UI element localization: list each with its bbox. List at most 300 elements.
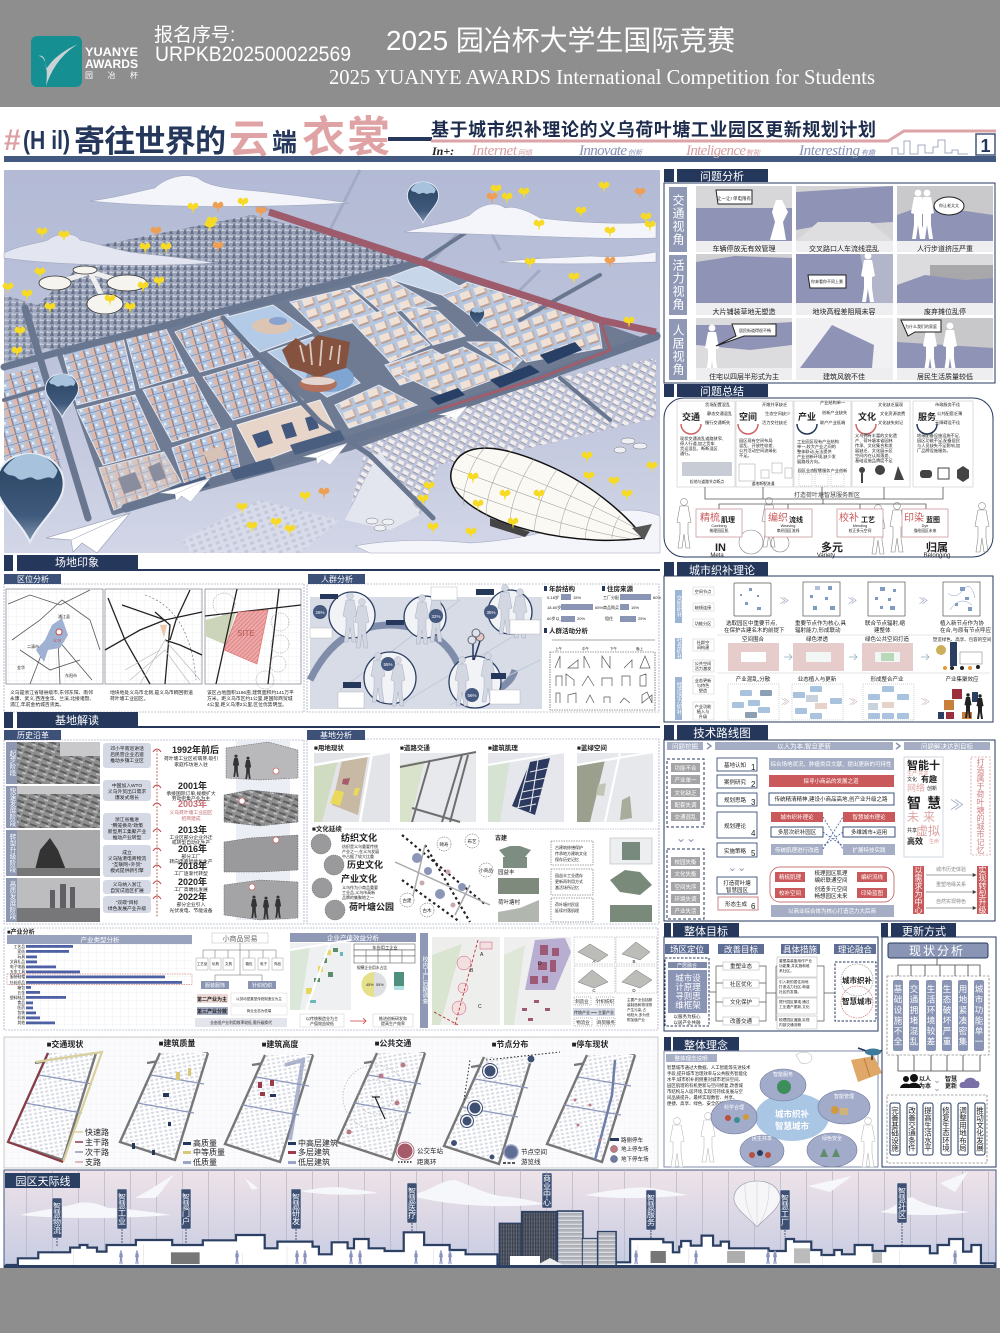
photo: four-storey housing <box>696 318 792 381</box>
timeline: 荷叶塘工业区初萌芽,吸引 <box>164 755 218 762</box>
heritage elevations and texts: 古建 <box>495 834 507 842</box>
strategy boxes: 描绘园区未来 <box>914 528 937 533</box>
historic photos <box>6 742 100 922</box>
cultural continuity: 历史文化 <box>347 859 383 870</box>
outcome arrows <box>913 865 988 915</box>
five problem columns: 市政服务不佳 <box>935 401 960 408</box>
concept description: 市结构与人居环境,实现可持续发展与空 <box>667 1088 743 1095</box>
perspective diagrams and conclusions: 装制造和物流物 <box>627 1002 653 1007</box>
strategy boxes: 校补 <box>839 511 859 524</box>
concrete measures: 系社区。 <box>779 968 794 973</box>
heritage elevations and texts: 园益丰工业遗存 <box>555 872 583 878</box>
panel: overall concept: 整体理念 <box>684 1038 728 1052</box>
bar chart: industry types: 针纺织品 <box>10 980 25 985</box>
research steps: ⌄⌄ <box>728 862 746 874</box>
map: site <box>205 589 301 689</box>
cultural continuity: ■文化延续 <box>312 824 342 833</box>
panel: urban fabric mending theory <box>664 562 993 722</box>
central diagram: 科学合理 <box>724 1104 744 1111</box>
crowd activity analysis: 上午 <box>555 646 562 651</box>
row 2: ring courts: 空间围合 <box>742 635 764 643</box>
bar chart: industry types: 工艺品 <box>14 944 25 949</box>
enterprise output analysis: 产值效益较低 <box>310 1020 334 1026</box>
photo: parked cars: 车辆停放无有效管理 <box>712 244 776 253</box>
panel: site analysis: 基地分析 <box>320 730 352 740</box>
pie chart: 45% <box>366 983 374 987</box>
small commodity trade tree: 服装服饰 <box>205 982 225 989</box>
concept description <box>666 1054 751 1107</box>
five problem columns: 生态空间缺少 <box>765 410 790 417</box>
keyword row: 创新 <box>628 149 643 157</box>
strategy boxes <box>696 509 948 537</box>
panel: crowd analysis: 人群分析 <box>321 574 353 584</box>
age structure bars: 18-60岁 <box>547 604 561 610</box>
improvement targets: 改善交通 <box>730 1017 752 1025</box>
heritage elevations and texts: 保存历史记忆 <box>555 856 579 862</box>
cultural continuity: 荷叶塘公园 <box>349 901 394 912</box>
history descriptions: 义乌陆港电商物流 <box>108 855 146 862</box>
word cloud: 网络 <box>907 782 925 793</box>
concept description: 智慧城市通过大数据、人工智能等先进技术 <box>667 1064 751 1071</box>
five problem columns: 智慧服务 <box>814 467 831 474</box>
history descriptions: 后民营企业迅速 <box>110 751 144 758</box>
city blocks east <box>290 265 602 428</box>
panel: crowd analysis <box>307 574 661 712</box>
residence source bars: 住房来源 <box>607 584 634 593</box>
strategy bars: 智慧城市理论 <box>852 813 886 821</box>
concrete measures: 打造活力社区,和谐 <box>779 984 810 989</box>
site maps A-D <box>432 937 571 1025</box>
dark parking patches <box>170 342 582 498</box>
clouds <box>4 176 660 553</box>
column headings <box>665 944 876 954</box>
strategy boxes: Mending <box>853 524 867 528</box>
timeline: 工厂高端化发展 <box>174 886 208 893</box>
site positioning: 城市设 <box>675 973 701 983</box>
site positioning: 计原理 <box>675 982 701 992</box>
site maps A-D: C <box>478 1004 482 1010</box>
timeline: 2003年 <box>178 798 207 809</box>
perspective diagrams and conclusions: 物流业 <box>576 1019 590 1026</box>
keyword row: Interesting <box>798 143 860 159</box>
five problem columns: 货运混乱、断断混区 <box>680 445 718 452</box>
concrete measures: 提升园区景观,通过 <box>779 999 810 1004</box>
map: land use: ■用地现状 <box>314 743 344 752</box>
left labels: 交织织补 <box>676 594 682 618</box>
historic photos: 转型升级阶段 <box>8 832 16 874</box>
strategy boxes: 蓝图 <box>926 515 940 524</box>
research steps: 智慧园区 <box>726 886 748 894</box>
five problem columns: 服务 <box>918 411 936 422</box>
strategy outcome group: 校补空间 <box>779 889 801 897</box>
city blocks west <box>62 313 303 510</box>
action pills: 完善基础设施 <box>890 1105 900 1153</box>
heritage elevations and texts: 延续村落肌理 <box>555 907 579 913</box>
crowd activity analysis: 人群活动分析 <box>549 626 588 635</box>
photo: parked cars <box>696 186 792 253</box>
map: building height: 多层建筑 <box>298 1147 330 1157</box>
enterprise output analysis: 企业产值效益分析 <box>327 933 380 942</box>
strategy boxes: 校正多元空间 <box>849 528 872 533</box>
map: green space <box>577 743 653 822</box>
research steps: 规划理论 <box>724 822 746 830</box>
people sketches <box>677 498 989 554</box>
photo: abandoned stalls: 废弃摊位乱停 <box>924 307 966 316</box>
crowd map with circles: 26% <box>315 610 325 615</box>
icon: Yuanye Awards logo: AWARDS <box>85 57 138 71</box>
map: site: SITE <box>237 629 255 638</box>
concrete measures <box>776 957 835 1029</box>
cultural continuity: 产业文化 <box>341 873 377 884</box>
photo: idle plot: 你来看你不同上景 <box>811 278 843 284</box>
panel: park skyline <box>4 1170 996 1268</box>
bar chart: industry types: 食品 <box>17 1000 25 1005</box>
photo: bare lawn <box>696 254 792 316</box>
strategy outcome group: 精梳肌理 <box>779 873 801 881</box>
five problem columns: 文化缺乏展现 <box>878 401 903 408</box>
five problem columns: 厂品牌设施服务。 <box>917 447 951 454</box>
enterprise output analysis: 年份用工企业 <box>372 944 398 951</box>
pie chart: 规模企业用水占比 <box>357 965 387 970</box>
perspective diagrams and conclusions: 传统产业 ⟷ 主要产业 <box>574 1009 614 1015</box>
culture route diagram: 小商品 <box>479 867 493 874</box>
heading tag: 园区天际线 <box>16 1174 70 1188</box>
panel: problem analysis <box>664 169 995 383</box>
five problem columns: 通行。 <box>680 450 693 457</box>
perspective diagrams and conclusions: D <box>632 988 636 993</box>
row 1: node diagrams: 植入新节点作为协 <box>940 619 985 627</box>
residence source bars: 60% <box>653 595 661 600</box>
registration number <box>154 24 351 66</box>
perspective diagrams and conclusions <box>573 937 657 1026</box>
pie chart <box>357 965 404 997</box>
map: parking <box>547 1039 649 1163</box>
cultural continuity: 产业之一,在义乌发展 <box>342 848 379 854</box>
photo: four-storey housing: 居民街道得很不畅 <box>739 327 771 333</box>
skyline function tags: 商业中心 <box>542 1173 552 1206</box>
strategy outcome group: 以商业综合体为核心打造活力大后商 <box>788 907 876 915</box>
perspective diagrams and conclusions: 针织纺织 <box>596 998 614 1005</box>
concrete measures: 引入新的居住用地 <box>779 979 809 984</box>
row 3: industry blocks: ≫ <box>921 697 930 707</box>
problem lists: 产业失活 <box>674 907 697 915</box>
photo: inconsistent architecture: 建筑风貌不佳 <box>823 372 865 381</box>
flying vehicle <box>39 266 147 314</box>
keyword row: In+: <box>431 144 454 158</box>
age structure bars: 0-18岁 <box>547 594 559 600</box>
skyline function tags: 智慧研发 <box>292 1192 300 1226</box>
people-centred smart update: 智慧 <box>945 1075 957 1083</box>
bar chart: industry types: 包装 <box>17 1010 25 1015</box>
panel: site analysis <box>307 730 659 924</box>
cultural continuity: 纺织是义乌重要传统 <box>342 843 378 849</box>
bar chart: industry types: 文具礼品 <box>10 959 25 964</box>
history descriptions: 自贸试验区扩展 <box>110 887 144 894</box>
photo: parked cars: 让一让! 单电限有 <box>717 195 751 202</box>
map: roads: ■道路交通 <box>400 743 430 752</box>
history descriptions <box>103 743 151 913</box>
map: city region: 二清市 <box>27 643 39 649</box>
perspective labels: 人居视角 <box>671 324 685 376</box>
word cloud: 创新 <box>927 785 937 792</box>
competition title chinese: 2025 园冶杯大学生国际竞赛 <box>386 25 735 56</box>
map: building height: 中高层建筑 <box>298 1138 338 1148</box>
five problem columns: 与人员缺失不足影响,加 <box>917 442 960 449</box>
left labels: 公共空间 <box>695 660 711 667</box>
map: building fabric: ■建筑肌理 <box>488 743 518 752</box>
map: node distribution <box>444 1039 560 1166</box>
outcome arrows: 实现转型升级 <box>978 865 987 915</box>
central diagram: 智慧城市 <box>775 1121 809 1131</box>
strategy outcome group: 编织联通空间 <box>814 876 848 884</box>
history descriptions: "双碳"目标 <box>116 899 138 906</box>
problem pills: 生活环境较差 <box>926 984 936 1048</box>
cultural continuity: 纺织文化 <box>341 832 377 843</box>
skyline function tags: 智慧医疗 <box>408 1186 416 1220</box>
problem lists: 文化缺乏 <box>674 789 697 797</box>
history descriptions: 新型用工集聚产业 <box>108 828 146 835</box>
location texts: 荷叶塘工业园区。 <box>110 695 148 702</box>
residence source bars: 25% <box>638 616 646 621</box>
small commodity trade tree: 文具 <box>225 961 232 966</box>
word cloud: 共享 <box>907 827 917 834</box>
history descriptions: 邓小平南巡讲话 <box>110 745 144 752</box>
courtyard blocks <box>99 400 337 510</box>
balloon <box>734 1181 780 1227</box>
bar chart: industry types <box>7 935 192 1027</box>
chevrons: ≫ <box>950 797 964 813</box>
skyline function tags: 智慧物流 <box>52 1201 62 1235</box>
history descriptions: 爆发式增长 <box>115 794 139 801</box>
pie chart: 55% <box>376 983 384 987</box>
central diagram: 智能服务 <box>773 1071 793 1078</box>
connector and park slogan: 打造荷叶塘智慧服务新区 <box>794 491 860 499</box>
left labels: 与特色 <box>697 682 710 689</box>
location texts: 浦江,年前金杭城百货类。 <box>10 701 64 708</box>
site maps A-D: A <box>480 952 484 958</box>
small commodity trade tree: 饰品 <box>274 961 282 966</box>
small commodity trade tree: 业态低产业利用效率较低,需升级换代 <box>210 1020 272 1025</box>
main roads <box>4 210 656 518</box>
crowd map with circles: 56% <box>467 693 477 698</box>
heading tag <box>5 1173 80 1188</box>
keyword row: 有趣 <box>861 149 876 157</box>
map: city region <box>6 589 103 684</box>
keyword row: Internet <box>471 143 518 159</box>
five problem columns: 创新产业缺失 <box>822 409 848 416</box>
five problem columns: 地缘配备设施设施不足, <box>917 432 960 439</box>
bar chart: industry types: 塑料制品 <box>10 995 25 1000</box>
history descriptions: 绿色发展产业升级 <box>108 905 146 912</box>
site maps A-D: D <box>538 961 542 967</box>
bar chart: industry types: 五金工具 <box>10 969 25 974</box>
map: building quality: ■建筑质量 <box>159 1038 195 1048</box>
culture route diagram: 古木 <box>422 907 432 914</box>
strategy bars: 多维城市+运用 <box>851 828 887 836</box>
concrete measures: 工业遗产更新,文化 <box>779 1004 810 1009</box>
panel: urban fabric mending theory: 城市织补理论 <box>689 563 755 577</box>
photo: inconsistent architecture <box>796 318 893 381</box>
small commodity trade tree: 针织纺织 <box>252 982 272 989</box>
crowd activity analysis <box>544 626 655 710</box>
panel: update methods: 更新方式 <box>902 924 946 938</box>
map: public transport: 公交车站 <box>417 1146 444 1155</box>
five problem columns: 义乌拥有丰富的文化遗 <box>855 432 898 439</box>
concept description: 便捷、高享、绿色、安全的城市。 <box>667 1100 733 1107</box>
strategy outcome group: 编织流线 <box>861 873 883 881</box>
timeline <box>153 744 219 918</box>
park block <box>223 305 312 352</box>
timeline: 2020年 <box>178 876 207 887</box>
map: parking: 路侧停车 <box>621 1136 644 1144</box>
photo: footpath <box>897 186 993 253</box>
historic photos: 高质发展阶段 <box>8 879 16 921</box>
five problem columns: 产、荷叶塘本省园林 <box>855 437 894 444</box>
goal slogan <box>971 757 990 855</box>
left labels: 业态更新 <box>695 677 711 684</box>
timeline: 义乌荷叶塘工业园区 <box>169 809 213 816</box>
five problem columns: 基础设施品牌度不足 <box>855 457 894 464</box>
site maps A-D: B <box>470 968 474 974</box>
culture route diagram: 古建 <box>402 897 412 904</box>
word cloud: 高效 <box>907 836 923 846</box>
five problem columns: 联产产业低端 <box>820 419 845 426</box>
concept description: 间品质提升。最终实现数智、共享、 <box>667 1094 737 1101</box>
improvement targets: 重塑业态 <box>730 962 752 970</box>
five problem columns: 不足。 <box>739 453 752 459</box>
timeline: 部分工厂 <box>181 853 201 860</box>
map: building height <box>225 1039 338 1167</box>
five problem columns: 产业 <box>798 411 816 422</box>
action pills: 调整用地布局 <box>958 1106 968 1153</box>
people-centred smart update: ⌄ <box>933 1075 941 1085</box>
site positioning: 以服务为核心 <box>674 1013 701 1020</box>
perspective labels: 交通视角 <box>671 193 685 246</box>
culture route diagram <box>395 834 493 922</box>
panel: location analysis <box>4 574 304 712</box>
strategy bars: 探寻小商品的发展之道 <box>803 777 859 785</box>
theory fusion <box>835 962 876 1021</box>
bar chart: industry types: 产业类型分析 <box>80 935 120 944</box>
column headings: 改善目标 <box>724 944 758 954</box>
panel: historical evolution: 历史沿革 <box>17 730 49 740</box>
heritage elevations and texts: 古建筑修缮保护 <box>555 844 583 850</box>
map: parking: 地上停车场 <box>621 1145 649 1153</box>
strategy bars: 综合场地状况、肿瘤类目文献、提出更新的可持性 <box>770 760 892 768</box>
row 2: ring courts: 塑造绿色、高享、包容的空间 <box>933 636 992 643</box>
photo: junction: 交叉路口人车流线混乱 <box>809 244 879 253</box>
five problem columns: 公共活动空间流缘化 <box>739 447 778 454</box>
small commodity trade tree: 商业业态为低端 <box>247 1008 272 1013</box>
five problem columns: 展缺乏、文化展示区 <box>855 447 893 454</box>
photo: residents: 居民生活质量较低 <box>917 372 973 381</box>
map: roads <box>400 743 476 822</box>
left labels: 轴线连接 <box>695 604 712 611</box>
panel: problem analysis: 问题分析 <box>700 169 744 183</box>
photo: residents <box>897 318 993 381</box>
word cloud: 有趣 <box>921 774 937 784</box>
strategy boxes: Weaving <box>781 524 795 528</box>
row 1: node diagrams: ≫ <box>848 596 857 606</box>
history descriptions: 成立 <box>122 849 132 856</box>
panel: current-state analysis maps <box>4 1037 658 1168</box>
theory fusion: 城市织补 <box>842 975 872 985</box>
enterprise output analysis: 校内工厂后期调查 <box>421 955 428 1004</box>
action pills <box>887 1095 987 1163</box>
five problem columns: 展路线方向。 <box>797 458 822 465</box>
row 2: ring courts <box>728 635 992 671</box>
timeline: 2022年 <box>178 891 207 902</box>
five problem columns: 园区功能不足,配备居民 <box>917 437 960 444</box>
heritage elevations and texts: 荷叶塘村 <box>498 898 521 906</box>
section header: 场地印象 <box>4 555 660 571</box>
bar chart: industry types: 医药 <box>17 1005 25 1010</box>
outcome keywords: Meta <box>710 553 724 559</box>
map: public transport: 距离环 <box>417 1157 437 1166</box>
site positioning: 产居融合 <box>677 962 697 969</box>
five problem columns: 道地断裂流通 <box>752 481 775 486</box>
central diagram: 城市织补 <box>775 1109 809 1119</box>
problem pills: 用地紧凑密集 <box>958 984 968 1048</box>
small commodity trade tree: 玩具 <box>212 961 219 966</box>
row 1: node diagrams: 辐射能力,形成联动 <box>795 626 841 634</box>
title: 端 <box>272 129 297 157</box>
strategy boxes: 编织 <box>768 511 788 524</box>
icon: Yuanye Awards logo: YUANYE <box>85 45 138 59</box>
map: parking: ■停车现状 <box>572 1039 608 1049</box>
location texts: 地块地处义乌市北侧,是义乌市稠回街道 <box>110 689 193 696</box>
small commodity trade tree: 小商品贸易 <box>222 934 258 943</box>
people-centred smart update: 更新 <box>945 1082 957 1090</box>
residence source bars: 租住 <box>605 615 613 621</box>
map: traffic: 次干路 <box>85 1147 109 1157</box>
south east district <box>350 358 656 515</box>
action pills: 改善交通条件 <box>907 1105 916 1153</box>
crowd map with circles: 55% <box>383 662 393 667</box>
map: green space: ■蓝绿空间 <box>577 743 607 752</box>
problem lists: 功能不合 <box>674 764 697 772</box>
location texts <box>10 689 294 708</box>
panel: overall concept <box>664 1037 888 1167</box>
people-centred smart update: 以人 <box>919 1076 931 1083</box>
crowd activity analysis: 下午 <box>610 646 618 651</box>
strategy boxes: 梳理园区肌 <box>710 528 729 533</box>
photo: footpath: 你让老太太 <box>939 202 959 208</box>
timeline: 工业区部分企业外迁 <box>169 834 213 841</box>
five problem columns: 交通 <box>682 411 700 422</box>
column headings: 具体措施 <box>783 944 817 954</box>
research steps: 6 <box>751 902 756 911</box>
concrete measures: 社区的发展。 <box>779 989 801 994</box>
strategy outcome group <box>770 867 894 917</box>
small commodity trade tree <box>195 933 287 1027</box>
small commodity trade tree: 工艺品 <box>197 961 208 966</box>
outcome keywords: Belonging <box>924 553 950 559</box>
site positioning <box>665 958 709 1026</box>
panel: industry analysis: ■产业分析 <box>7 928 35 936</box>
map: building height: ■建筑高度 <box>262 1039 298 1049</box>
concept description: 整体理念说明 <box>674 1054 708 1062</box>
culture route diagram: 布艺 <box>468 838 477 845</box>
age structure bars <box>544 584 603 622</box>
small commodity trade tree: 第三产业分散 <box>197 1008 227 1015</box>
faint roads in the distance <box>240 170 540 310</box>
left labels: 社会织补 <box>676 636 682 660</box>
row 1: node diagrams: ≫ <box>919 596 928 606</box>
illustration: puzzle team <box>938 689 984 719</box>
word cloud: 生产 共享 <box>907 770 928 777</box>
research steps: 案例研究 <box>724 778 746 786</box>
